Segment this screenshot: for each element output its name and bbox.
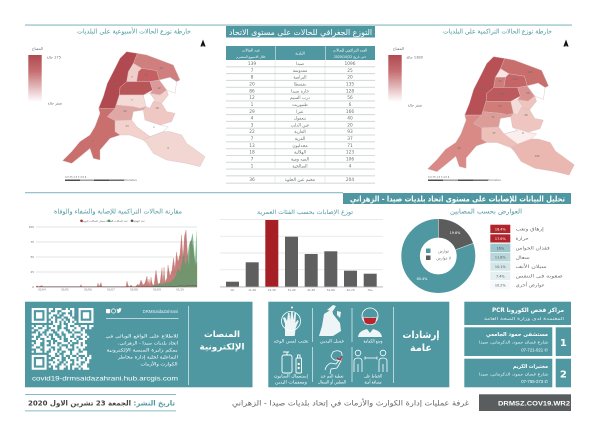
chart legend: معدل الحالات اليومية [81,219,105,223]
table rows: 135 [346,82,354,88]
table rows: درب السيم [290,96,310,101]
panel: cumulative line chart: 01/05 [61,288,69,292]
map value labels: 37 [492,131,496,135]
section heading bar [25,192,571,204]
platforms heading: الإلكترونية [200,342,245,352]
panel: geographic table [226,26,375,183]
table rows: 93 [347,129,353,135]
panel: cumulative line chart [29,208,197,292]
bar labels: 70+ [367,288,373,292]
symptom rows: 10.2% [495,284,506,288]
chart title: توزع الإصابات بحسب الفئات العمرية [257,209,353,216]
table row bands [226,67,375,183]
panel: cumulative line chart: 01/06 [84,288,92,292]
bar labels: 21-30 [268,288,276,292]
symptom rows: 7.4% [496,274,505,278]
label [274,374,308,386]
panel: symptoms [411,208,563,289]
table rows: الغازية [294,130,306,135]
table rows: 204 [346,177,354,183]
chart title: مقارنة الحالات التراكمية للإصابة والشفاء والوفاة [54,208,182,216]
PCR header [464,302,571,325]
table rows: 71 [347,143,353,149]
panel: age distribution bar chart [220,209,383,292]
map value labels: 166 [528,70,533,74]
choropleth map: weekly [63,52,205,167]
organisation line: غرفة عمليات إدارة الكوارث والأزمات في إتحاد بلديات صيدا - الزهراني [232,398,469,408]
platforms heading [200,330,245,352]
table rows: حارة صيدا [291,89,309,94]
table rows: مجدليون [292,144,308,149]
bar labels: 10- [230,288,235,292]
chart title: العوارض بحسب المصابين [450,208,522,216]
table rows: 12 [249,95,255,101]
social media line: DRMSaidaZahrani [143,309,178,314]
description text [106,334,179,368]
table rows: الميه ومية [291,158,309,162]
symptom labels: إرهاق وتعب [516,226,544,232]
table rows: 1 [251,163,254,169]
scale bar: 0 0.75 1.5 3 4.5 6 [428,176,450,179]
description text: يمكم زايرة المنصة الإلكترونية [106,348,179,354]
centre 2: شارع غسان حمود، الدكرماني، صيدا [479,372,549,376]
heading: cumulative map: خارطة توزع الحالات التراكمية على البلديات [443,28,552,36]
symptom labels: فقدان الحواس [516,246,550,252]
symptom labels: سيلان الأنف [516,263,547,270]
map value labels: 3 [167,146,169,150]
QR code [32,309,93,369]
panel: general guidance [268,302,449,387]
bar labels: 41-50 [307,288,315,292]
panel: geographic table: العدد التراكمي للحالات [333,48,367,52]
table rows: البرامية [293,76,307,81]
report code box [479,394,571,411]
panel: cumulative line chart: 01/09 [153,288,161,292]
table rows: 29 [249,109,255,115]
panel: cumulative line chart: 01/10 [176,288,184,292]
heading: weekly map: خارطة توزع الحالات الأسبوعية على البلديات [77,26,191,36]
guidance heading: عامة [410,343,432,354]
scale bar [65,176,138,182]
map legend: 175 حالة [47,56,61,60]
map value labels: 128 [499,92,504,96]
panel: PCR testing centres: مراكز فحص الكورونا PCR [492,307,564,314]
table rows: 106 [346,156,354,162]
table rows: 20 [347,75,353,81]
map value labels: 29 [159,66,163,70]
scale bar: Kilometers [488,179,502,182]
bars [226,220,377,287]
area: recoveries [150,229,197,287]
symptom rows: 18.4% [495,227,506,231]
icon: cover mouth when sneezing [325,351,342,374]
map value labels: 20 [144,73,148,77]
icon: north arrow [200,40,206,46]
table rows: 37 [347,136,353,142]
map value labels: 71 [491,115,495,119]
table rows: 123 [346,150,354,156]
area: daily cases [36,230,197,287]
platforms heading: المنصات [204,330,240,340]
table rows: 36 [249,177,255,183]
guidance heading [402,330,440,354]
map legend [388,46,424,108]
symptom rows: 16% [497,246,505,250]
centre 2: مختبرات الكريم [513,363,548,370]
table rows: بنعفول [294,117,306,122]
scale bar: 0 0.75 1.5 3 4.5 6 [65,176,87,179]
panel: cumulative cases map [388,28,574,182]
map legend: صفر حالة [48,102,62,106]
icon: north arrow [563,40,569,46]
table rows: عين الدلب [291,123,310,128]
table rows: 8 [251,75,254,81]
table rows: 139 [248,61,256,67]
panel: geographic table: التوزع الجغرافي للحالات على مستوى الاتحاد [229,28,372,37]
table rows: 1096 [345,61,356,67]
top rule [25,24,572,26]
table rows: 20 [249,82,255,88]
table rows: 86 [249,88,255,94]
table rows: 3 [251,122,254,128]
table rows: 1 [251,102,254,108]
map value labels: 139 [113,82,118,86]
table rows: طنبوريت [292,103,308,108]
line: deaths [36,285,197,287]
table rows: 7 [251,136,254,142]
panel: geographic table: عدد الحالات [242,48,260,52]
panel: geographic table: خلال الاسبوع المنصرم [236,55,266,60]
map value labels: 106 [535,154,540,158]
chart legend: عدد الحالات الشفاء [106,219,128,223]
centre 1 [464,327,571,356]
centre 2: 2 [560,370,567,380]
label: الحفاظ على [364,374,382,380]
table rows: 56 [347,95,353,101]
table rows: 7 [251,156,254,162]
centre 2 [464,359,571,387]
table title [226,26,375,38]
table rows: 7 [251,68,254,74]
panel: cumulative line chart: 50 [30,255,34,259]
icon: avoid touching face [282,306,300,336]
map value labels: 25 [457,146,461,150]
map value labels: 7 [131,98,133,102]
panel: cumulative line chart: 01/07 [107,288,115,292]
scale bar: Kilometers [124,179,138,182]
label: غسل اليدين [320,340,345,344]
table rows: 18 [249,150,255,156]
choropleth map: cumulative [428,57,574,175]
table rows: الهلالية [294,151,306,156]
panel: cumulative line chart: 100 [29,225,34,229]
chart legend: عدد الوفيات [131,219,145,223]
label [318,374,346,386]
table rows: القرية [295,137,305,142]
map value labels: 93 [498,104,502,108]
bar labels: 31-40 [288,288,296,292]
guidance heading: إرشادات [402,330,440,341]
map value labels [92,66,169,150]
map value labels: 12 [157,86,161,90]
donut chart: لا عوارض [436,256,451,260]
table rows: 25 [347,68,353,74]
panel: cumulative line chart: 01/08 [130,288,138,292]
panel: weekly cases map [28,26,206,182]
label: وضع الكمامة [364,338,382,344]
table rows: 128 [346,88,354,94]
map legend: المفتاح [393,46,404,51]
description text: اتحاد بلديات صيدا - الزهراني، [118,342,178,346]
table rows: 20 [347,122,353,128]
publication date: تاريخ النشر: الجمعة 23 تشرين الاول 2020 [28,400,175,408]
table rows: عبرا [296,110,304,115]
symptom labels: سعال [516,255,530,261]
map value labels: 22 [123,109,127,113]
panel: cumulative line chart: 01/04 [38,288,46,292]
table rows: الصالحية [292,164,308,169]
map value labels: 6 [522,131,524,135]
bar labels: 51-60 [327,288,335,292]
table rows: 22 [249,129,255,135]
map value labels: 7 [131,75,133,79]
table rows: 13 [249,143,255,149]
map value labels: 135 [513,77,518,81]
table rows: مخيم عين الحلوة [285,178,315,183]
symptom labels: عوارض أخرى [516,282,545,289]
symptom labels [516,226,563,289]
icon: wash hands [319,305,341,336]
centre 1: شارع غسان حمود، الدكرماني، صيدا [479,340,549,344]
scale bar [428,176,502,182]
map legend: المفتاح [32,46,43,51]
symptom rows: 10.1% [495,265,506,269]
label [364,374,382,386]
symptom labels: حرارة [516,236,529,242]
donut chart: 80.4% [417,277,428,281]
label: إستعمال الصابون [274,374,308,380]
map value labels: 20 [498,79,502,83]
label: تجنب لمس الوجه [274,340,309,344]
table rows: صيدا [296,62,305,67]
panel: electronic platforms [25,302,252,387]
report code box: DRMSZ.COV19.WR2 [498,400,570,407]
table header [226,46,375,60]
table rows: 40 [347,116,353,122]
table rows: 6 [349,102,352,108]
panel: PCR testing centres [464,302,571,387]
map legend: صفر حالة [408,104,422,108]
centre 1: 1 [560,338,567,349]
map value labels: 86 [131,86,135,90]
symptom rows: 11.8% [495,256,506,260]
donut chart [411,219,473,284]
table rows [248,61,356,183]
map value labels: 40 [524,113,528,117]
icon: soap and sanitizer [282,352,302,373]
donut chart: 19.6% [450,231,461,235]
map value labels: 56 [526,91,530,95]
symptom rows: 17.6% [495,237,506,241]
section heading bar: تحليل البيانات للإصابات على مستوى اتحاد بلديات صيدا - الزهراني [350,194,565,204]
panel: geographic table: حتى تاريخ 2020/10/22 [334,55,366,59]
centre 2: 07-755-273 ✆ [521,379,548,384]
table rows: مغدوشة [293,69,307,74]
map legend: 1380 حالة [406,56,424,60]
description text: الكوارث والأزمات [140,360,178,368]
label: ومعقمات اليدين [275,380,307,386]
symptom labels: صعوبة في التنفس [516,273,563,279]
icon: wear mask [358,308,382,337]
donut chart: عوارض [438,250,450,254]
chart legend [80,219,145,223]
description text: للاطلاع على الواقع الوبائي في [106,334,178,340]
bar labels: 11-20 [248,288,256,292]
table rows: بقسطا [294,82,306,88]
centre 1: مستشفى حمود الجامعي [486,332,548,338]
map value labels: 1 [153,125,155,129]
description text: التفاعلية لخلية إدارة مخاطر [117,356,178,360]
label: مسافة آمنة [364,380,382,386]
label: تغطية الفم عند [320,374,344,380]
bar labels: 61-70 [347,288,355,292]
panel: cumulative line chart: 25 [30,270,34,274]
label: العطس أو السعال [318,378,346,386]
panel: cumulative line chart: 75 [30,240,34,244]
symptom rows [490,225,510,289]
panel: PCR testing centres: المعتمدة لدى وزارة الصحة العامة [484,317,564,322]
table rows: 166 [346,109,354,115]
map value labels: 13 [125,124,129,128]
table rows: 4 [251,116,254,122]
panel: geographic table: البلدية [295,52,305,56]
panel: cumulative line chart: 0 [32,285,34,289]
bar labels [230,288,373,292]
map legend [28,46,62,106]
table rows: 4 [349,163,352,169]
icon: keep distance [354,350,387,372]
map value labels: 7 [92,139,94,143]
social media line [106,308,178,319]
map value labels: 18 [155,106,159,110]
map value labels: 1096 [479,87,486,91]
website URL: covid19-drmsaidazahrani.hub.arcgis.com [32,376,178,382]
centre 1: 07-721-021 ✆ [521,348,548,352]
map value labels [457,70,540,158]
